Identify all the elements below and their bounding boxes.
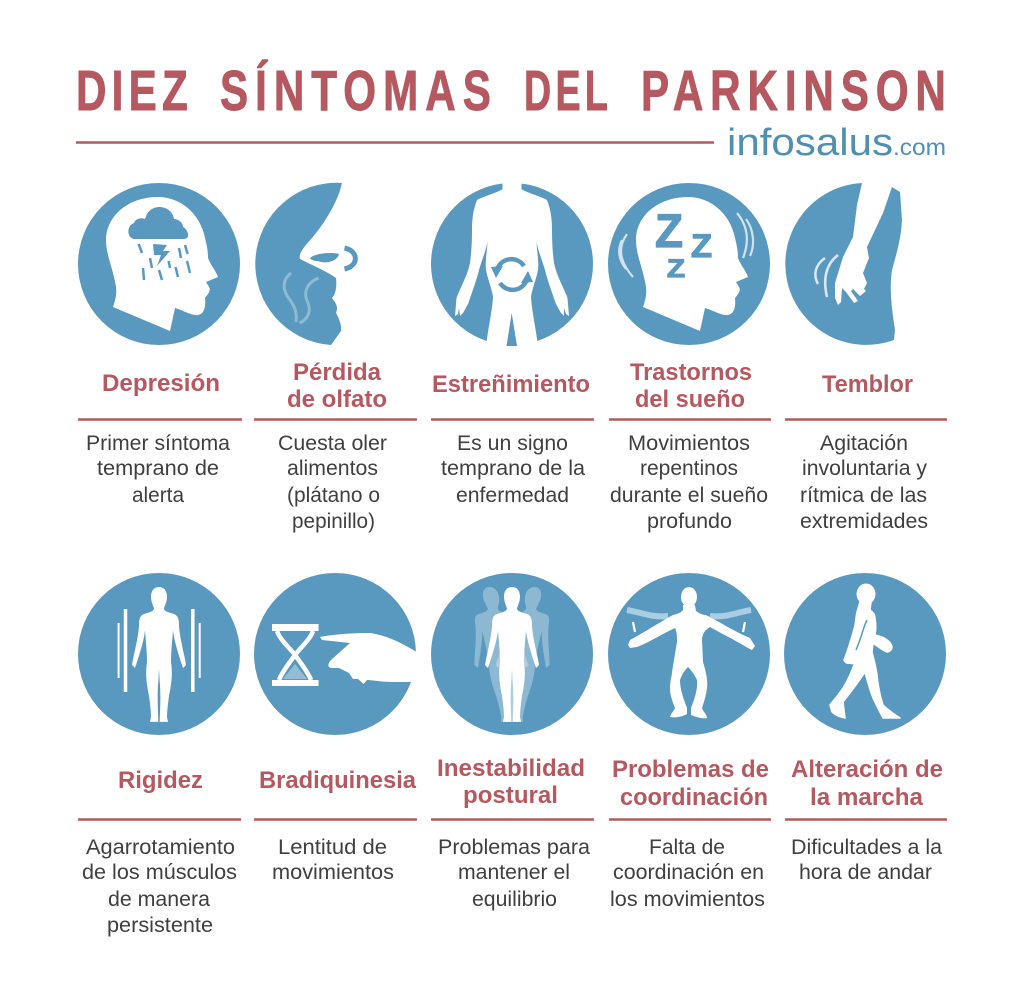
description — [610, 432, 768, 533]
description — [441, 432, 585, 507]
description: involuntaria y — [802, 457, 928, 480]
heading — [437, 755, 585, 809]
description — [272, 836, 394, 884]
description: Lentitud de — [278, 836, 387, 859]
icon: rigid body between bars — [78, 573, 240, 735]
heading: Alteración de — [791, 756, 943, 783]
symptom: Pérdida de olfato — [254, 183, 417, 533]
brand: infosalus.com: infosalus — [727, 122, 893, 164]
description: Problemas para — [438, 836, 590, 859]
heading: del sueño — [635, 386, 745, 413]
heading: Temblor — [822, 371, 913, 398]
symptom: Temblor — [785, 183, 947, 533]
rule — [254, 818, 417, 821]
description: Movimientos — [628, 432, 750, 455]
description: temprano de — [97, 457, 219, 480]
description: alerta — [132, 484, 184, 507]
description: coordinación en — [613, 861, 764, 884]
icon: hourglass and pointing hand — [254, 573, 420, 735]
rule — [78, 418, 242, 421]
heading: Estreñimiento — [432, 371, 590, 398]
description — [86, 432, 230, 507]
description: persistente — [107, 914, 213, 937]
title: PARKINSON — [641, 59, 946, 123]
description: Dificultades a la — [791, 836, 942, 859]
heading: Problemas de — [612, 756, 769, 783]
description: los movimientos — [610, 888, 765, 911]
title: DEL — [524, 59, 608, 123]
description — [438, 836, 590, 911]
description — [278, 432, 387, 533]
icon: head with Z letters: Z — [667, 255, 685, 283]
symptom: Rigidez — [78, 573, 241, 937]
title — [76, 59, 946, 123]
description: (plátano o — [287, 484, 380, 507]
symptom: Inestabilidad postural — [431, 573, 594, 911]
description: profundo — [647, 510, 732, 533]
description — [791, 836, 942, 884]
icon: body with outstretched arms — [608, 573, 770, 735]
heading: Bradiquinesia — [259, 767, 417, 794]
rule — [609, 418, 771, 421]
rule — [431, 418, 594, 421]
heading: Pérdida — [293, 359, 382, 386]
brand: infosalus.com: .com — [893, 134, 946, 160]
description: durante el sueño — [610, 484, 768, 507]
description: equilibrio — [472, 888, 557, 911]
description — [82, 836, 237, 937]
heading: la marcha — [810, 784, 924, 811]
heading: de olfato — [287, 386, 387, 413]
heading: postural — [463, 782, 558, 809]
description: Es un signo — [457, 432, 568, 455]
heading: Rigidez — [118, 767, 203, 794]
description: Cuesta oler — [278, 432, 387, 455]
icon: trembling arm — [785, 183, 902, 345]
description: movimientos — [272, 861, 394, 884]
icon: head with Z letters: Z — [691, 228, 712, 264]
title rule — [76, 141, 714, 144]
description: pepinillo) — [292, 510, 375, 533]
description: repentinos — [640, 457, 738, 480]
description — [610, 836, 765, 911]
description: alimentos — [287, 457, 378, 480]
rule — [609, 818, 771, 821]
brand: infosalus.com — [727, 122, 946, 164]
symptom: Trastornos del sueño — [608, 183, 771, 533]
rule — [254, 418, 417, 421]
symptom: Alteración de la marcha — [784, 573, 947, 884]
icon: head with Z letters: Z — [655, 204, 683, 257]
heading — [791, 756, 943, 811]
symptom: Bradiquinesia — [254, 573, 420, 884]
heading: Inestabilidad — [437, 755, 585, 782]
heading: Trastornos — [630, 359, 752, 386]
description: mantener el — [458, 861, 570, 884]
title: SÍNTOMAS — [220, 59, 491, 123]
description: de manera — [108, 888, 210, 911]
rule — [78, 818, 241, 821]
description: temprano de la — [441, 457, 585, 480]
symptom: Estreñimiento — [431, 180, 594, 507]
description: extremidades — [800, 510, 928, 533]
icon: nose profile with smell — [255, 183, 355, 345]
icon: head with Z letters — [608, 183, 770, 345]
description: rítmica de las — [800, 484, 927, 507]
icon: head with storm cloud — [78, 183, 240, 345]
title: DIEZ — [76, 59, 188, 123]
description: Agarrotamiento — [86, 836, 235, 859]
icon: walking figure — [784, 573, 946, 735]
heading: Depresión — [102, 370, 220, 397]
description — [800, 432, 928, 533]
description: Primer síntoma — [86, 432, 230, 455]
icon: swaying bodies — [431, 573, 593, 735]
heading — [630, 359, 752, 413]
icon: torso with intestine cycle — [431, 180, 593, 347]
rule — [785, 818, 947, 821]
heading — [612, 756, 769, 811]
description: enfermedad — [456, 484, 569, 507]
description: Agitación — [820, 432, 908, 455]
description: de los músculos — [82, 861, 237, 884]
description: hora de andar — [799, 861, 932, 884]
rule — [785, 418, 947, 421]
symptom: Depresión — [78, 183, 242, 507]
rule — [431, 818, 594, 821]
heading — [287, 359, 387, 413]
symptom: Problemas de coordinación — [608, 573, 771, 911]
heading: coordinación — [620, 784, 768, 811]
description: Falta de — [649, 836, 725, 859]
